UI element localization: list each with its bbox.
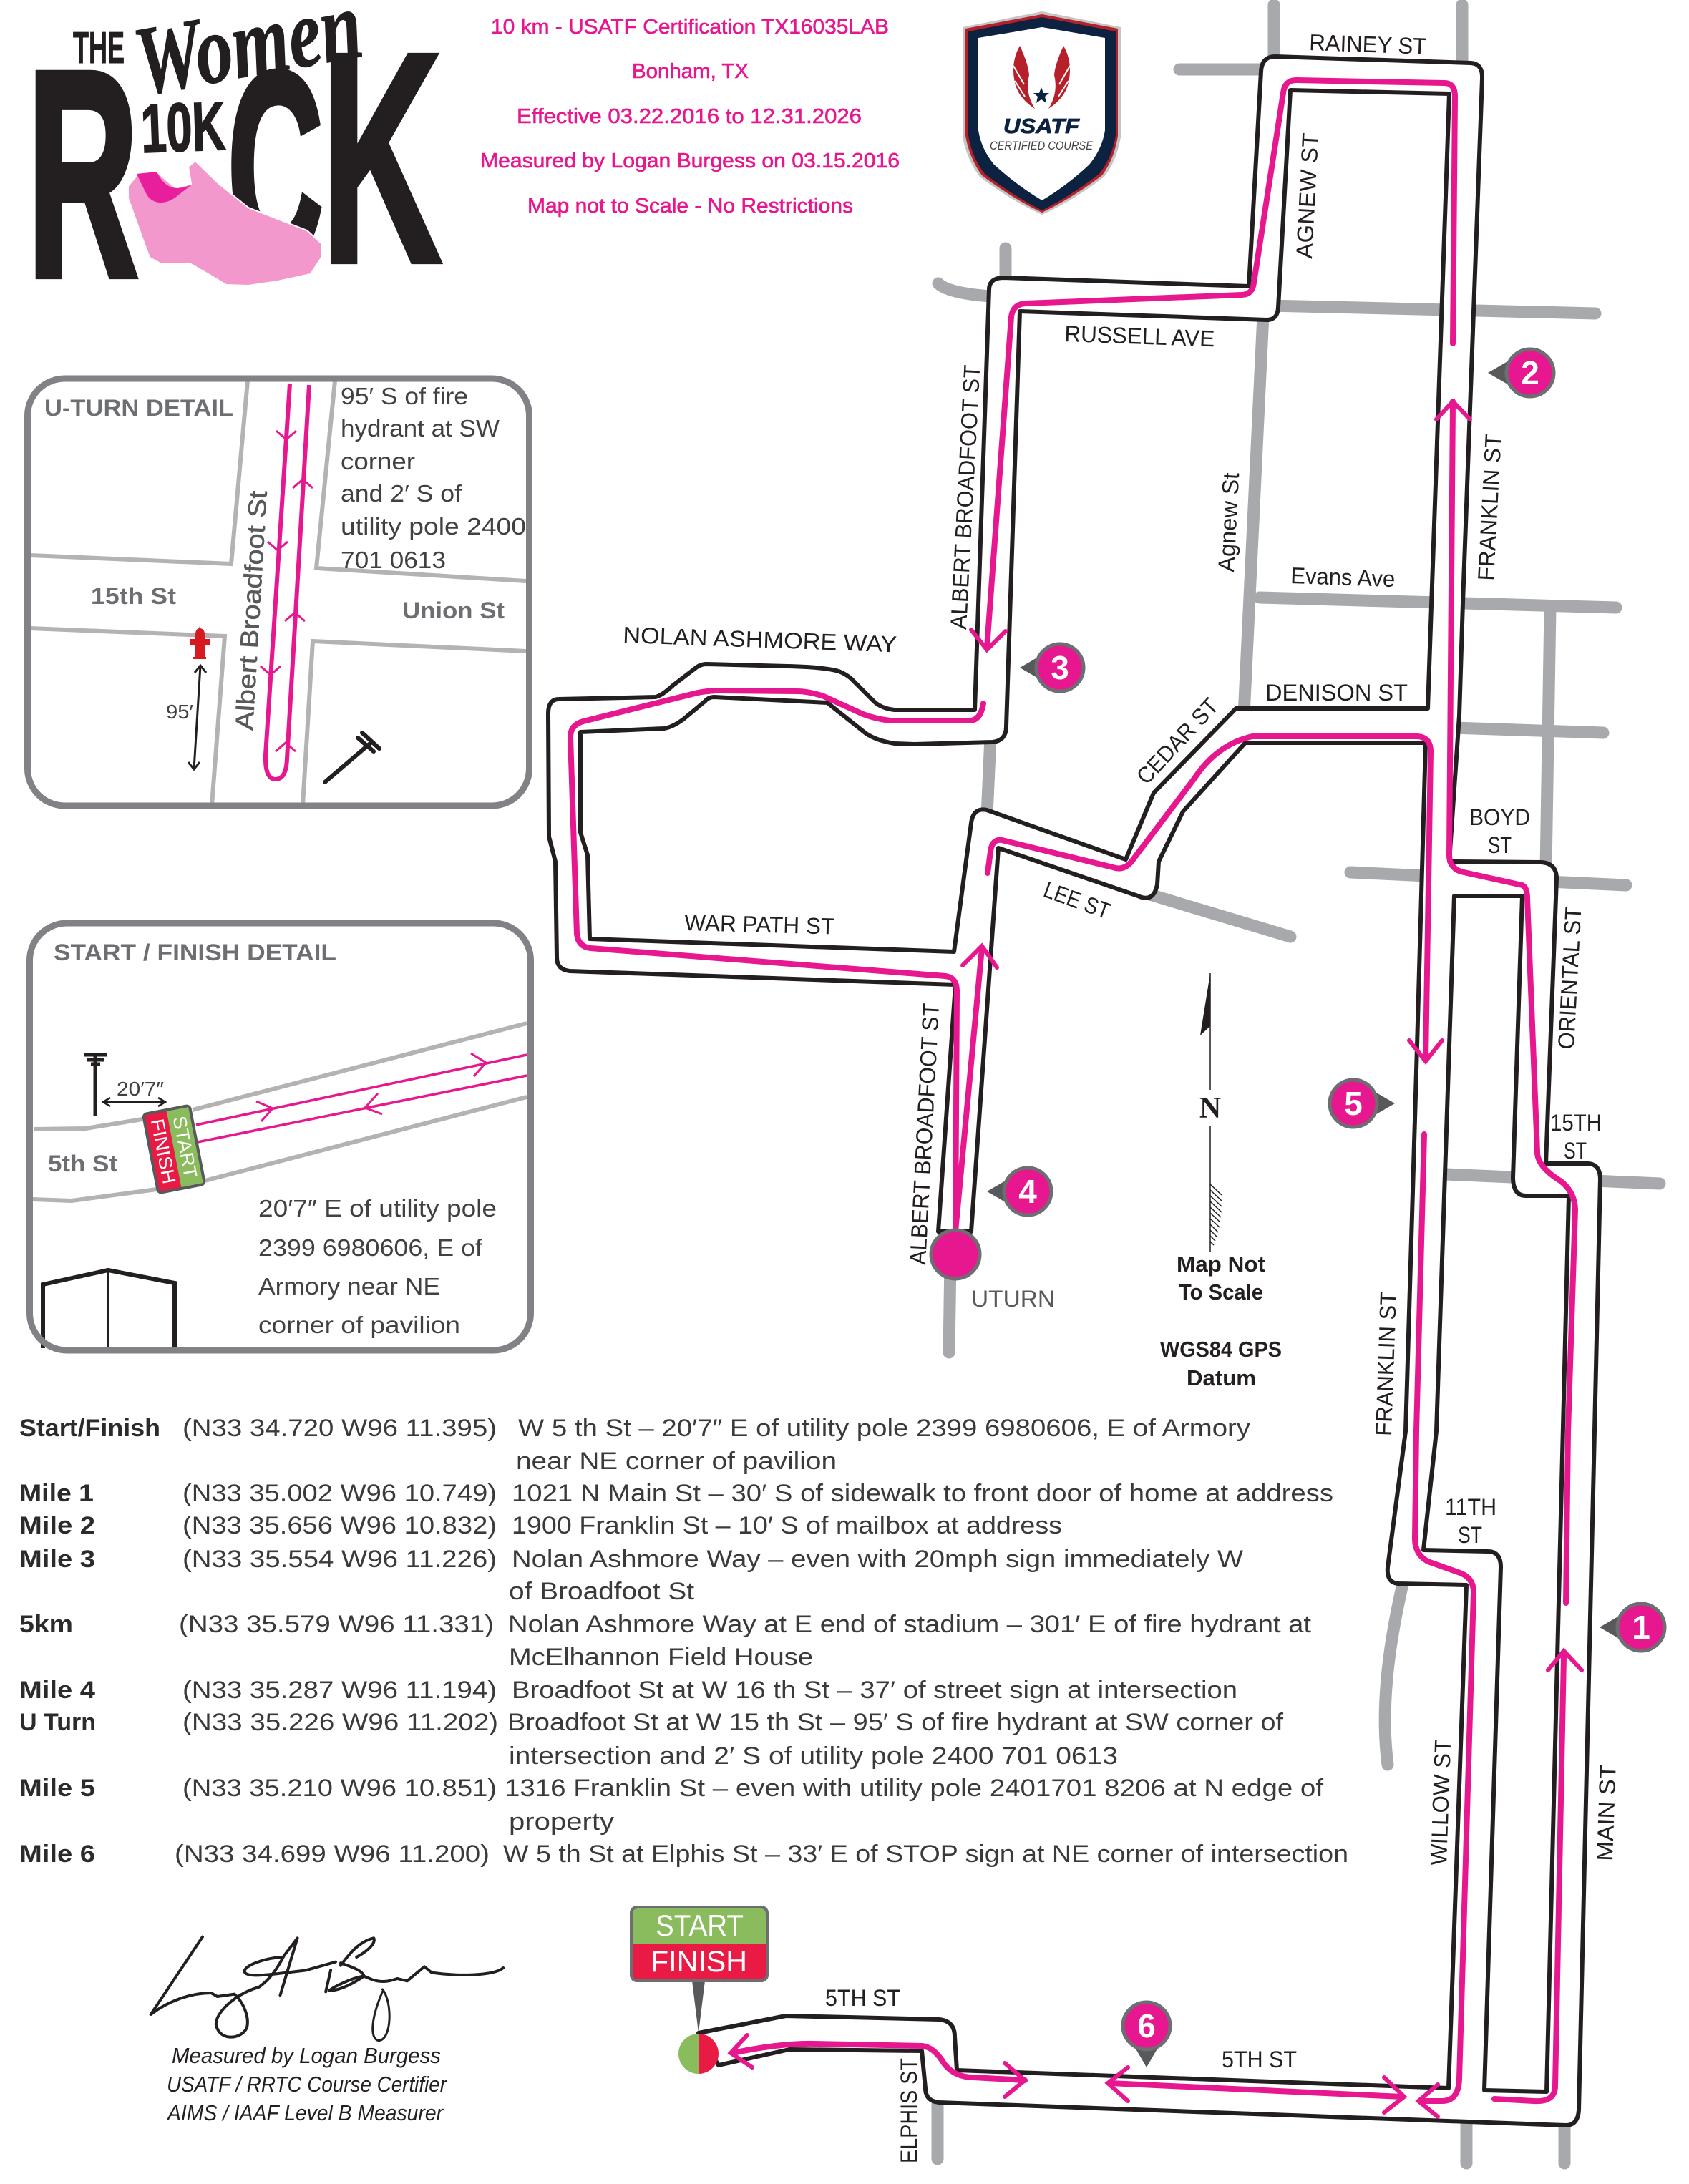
note: map not to scale and datum: Datum bbox=[1187, 1365, 1256, 1390]
panel: start / finish detail bbox=[30, 923, 531, 1350]
marker: mile 6 bbox=[1123, 2002, 1170, 2067]
header: certification details: Effective 03.22.2016 to 12.31.2026 bbox=[517, 105, 862, 128]
text: certifier credit: USATF / RRTC Course Certifier bbox=[167, 2072, 447, 2097]
marker: mile 4 bbox=[987, 1168, 1051, 1215]
map: street labels: 11TH bbox=[1445, 1494, 1496, 1520]
table: mile marker locations: 1021 N Main St – 30′ S of sidewalk to front door of home at address bbox=[512, 1480, 1333, 1507]
table: mile marker locations: Start/Finish bbox=[19, 1415, 160, 1442]
table: mile marker locations: (N33 35.002 W96 10.749) bbox=[182, 1480, 497, 1507]
marker: mile 4: 4 bbox=[1018, 1173, 1037, 1210]
marker: mile 1: 1 bbox=[1632, 1609, 1650, 1646]
header: certification details bbox=[480, 16, 900, 218]
panel: start / finish detail: 20′7″ bbox=[117, 1078, 164, 1100]
icon: USATF certified course badge: USATF bbox=[1003, 115, 1080, 138]
map: street labels: Agnew St bbox=[1213, 472, 1244, 572]
panel: U-turn detail: 15th St bbox=[91, 583, 176, 609]
panel: U-turn detail: Albert Broadfoot St bbox=[230, 489, 273, 731]
map: street labels: 5TH ST bbox=[1222, 2047, 1297, 2072]
panel: start / finish detail: 2399 6980606, E of bbox=[258, 1234, 483, 1261]
map: street labels: ELPHIS ST bbox=[896, 2058, 922, 2163]
marker: start finish flag bbox=[630, 1906, 769, 2074]
table: mile marker locations: (N33 35.579 W96 11.331) bbox=[179, 1611, 494, 1638]
table: mile marker locations: W 5 th St at Elphis St – 33′ E of STOP sign at NE corner of intersection bbox=[503, 1841, 1348, 1868]
table: mile marker locations: (N33 34.699 W96 11.200) bbox=[175, 1841, 490, 1868]
icon: USATF certified course badge: CERTIFIED COURSE bbox=[990, 140, 1094, 152]
text: certifier credit: Measured by Logan Burgess bbox=[172, 2043, 441, 2068]
header: certification details: Measured by Logan Burgess on 03.15.2016 bbox=[480, 150, 900, 172]
panel: U-turn detail: corner bbox=[341, 448, 415, 474]
table: mile marker locations: of Broadfoot St bbox=[509, 1578, 695, 1605]
marker: U-turn point bbox=[931, 1230, 980, 1279]
map: street labels: DENISON ST bbox=[1265, 680, 1408, 706]
map: road network outline bbox=[548, 57, 1600, 2125]
table: mile marker locations: Mile 3 bbox=[19, 1546, 95, 1573]
text: certifier credit bbox=[166, 2043, 447, 2125]
map: street labels: FRANKLIN ST bbox=[1371, 1291, 1401, 1436]
marker: mile 2: 2 bbox=[1521, 354, 1539, 391]
map: street labels: 5TH ST bbox=[825, 1985, 900, 2011]
table: mile marker locations: Mile 5 bbox=[19, 1775, 95, 1802]
table: mile marker locations: McElhannon Field House bbox=[509, 1644, 813, 1671]
note: map not to scale and datum: To Scale bbox=[1179, 1279, 1263, 1305]
header: certification details: Map not to Scale - No Restrictions bbox=[527, 195, 853, 218]
panel: start / finish detail: 5th St bbox=[48, 1151, 117, 1176]
icon: north arrow: N bbox=[1199, 1092, 1221, 1125]
table: mile marker locations: near NE corner of pavilion bbox=[516, 1448, 837, 1475]
marker: mile 3 bbox=[1020, 644, 1084, 691]
header: certification details: Bonham, TX bbox=[632, 60, 749, 83]
table: mile marker locations: Broadfoot St at W 15 th St – 95′ S of fire hydrant at SW corner of bbox=[507, 1709, 1284, 1736]
map: street labels: ST bbox=[1564, 1138, 1587, 1164]
panel: U-turn detail: 95′ bbox=[166, 701, 193, 723]
table: mile marker locations: 1900 Franklin St – 10′ S of mailbox at address bbox=[512, 1512, 1062, 1539]
map: gray side streets bbox=[938, 5, 1660, 2163]
map: street labels: CEDAR ST bbox=[1131, 693, 1223, 789]
panel: U-turn detail: U-TURN DETAIL bbox=[44, 395, 233, 421]
panel: U-turn detail: Union St bbox=[402, 598, 505, 623]
panel: start / finish detail: START / FINISH DETAIL bbox=[54, 940, 336, 965]
table: mile marker locations: Nolan Ashmore Way at E end of stadium – 301′ E of fire hydrant at bbox=[508, 1611, 1312, 1638]
note: map not to scale and datum: WGS84 GPS bbox=[1160, 1337, 1282, 1362]
map: street labels: RUSSELL AVE bbox=[1064, 321, 1215, 351]
marker: mile 2 bbox=[1488, 349, 1554, 396]
table: mile marker locations: (N33 35.210 W96 10.851) bbox=[182, 1775, 497, 1802]
panel: U-turn detail: 95′ S of fire bbox=[341, 383, 468, 409]
map: street labels: WILLOW ST bbox=[1426, 1739, 1456, 1866]
panel: start / finish detail: START bbox=[169, 1114, 202, 1180]
panel: U-turn detail bbox=[27, 379, 530, 806]
marker: mile 1 bbox=[1600, 1604, 1665, 1651]
marker: mile 6: 6 bbox=[1137, 2007, 1156, 2044]
table: mile marker locations: Broadfoot St at W 16 th St – 37′ of street sign at intersection bbox=[512, 1677, 1237, 1704]
table: mile marker locations: Mile 2 bbox=[19, 1512, 95, 1539]
map: street labels: ST bbox=[1488, 832, 1512, 858]
map: street labels: LEE ST bbox=[1041, 877, 1114, 924]
map: street labels: MAIN ST bbox=[1592, 1764, 1621, 1861]
table: mile marker locations: intersection and 2′ S of utility pole 2400 701 0613 bbox=[509, 1742, 1118, 1770]
table: mile marker locations: (N33 35.656 W96 10.832) bbox=[182, 1512, 497, 1539]
map: street labels bbox=[623, 29, 1621, 2163]
table: mile marker locations: (N33 35.226 W96 11.202) bbox=[182, 1709, 498, 1736]
marker: mile 3: 3 bbox=[1051, 649, 1069, 686]
map: street labels: AGNEW ST bbox=[1291, 132, 1323, 259]
panel: start / finish detail: corner of pavilion bbox=[258, 1312, 460, 1338]
logo: The Women 10K Rock: K bbox=[321, 0, 442, 326]
table: mile marker locations: Mile 4 bbox=[19, 1677, 95, 1704]
marker: start finish flag: FINISH bbox=[651, 1944, 747, 1978]
map: street labels: BOYD bbox=[1469, 804, 1530, 830]
table: mile marker locations: 5km bbox=[19, 1611, 73, 1638]
map: street labels: WAR PATH ST bbox=[684, 910, 835, 939]
table: mile marker locations: property bbox=[509, 1808, 614, 1836]
table: mile marker locations: Mile 6 bbox=[19, 1841, 95, 1868]
marker: mile 5: 5 bbox=[1344, 1085, 1363, 1122]
table: mile marker locations: (N33 34.720 W96 11.395) bbox=[182, 1415, 497, 1442]
panel: U-turn detail: utility pole 2400 bbox=[341, 513, 526, 540]
panel: U-turn detail: hydrant at SW bbox=[341, 415, 500, 442]
logo: The Women 10K Rock: 10K bbox=[140, 88, 227, 167]
marker: mile 5 bbox=[1330, 1080, 1395, 1127]
icon: USATF certified course badge bbox=[963, 11, 1121, 215]
map: street labels: NOLAN ASHMORE WAY bbox=[623, 622, 897, 657]
logo: The Women 10K Rock bbox=[27, 0, 442, 338]
note: map not to scale and datum: Map Not bbox=[1177, 1252, 1265, 1277]
signature bbox=[151, 1937, 503, 2041]
table: mile marker locations: W 5 th St – 20′7″ E of utility pole 2399 6980606, E of Armory bbox=[518, 1415, 1250, 1442]
map: street labels: Evans Ave bbox=[1290, 562, 1396, 592]
panel: U-turn detail: and 2′ S of bbox=[341, 480, 462, 507]
panel: U-turn detail: 701 0613 bbox=[341, 547, 446, 573]
map: street labels: ST bbox=[1458, 1522, 1482, 1548]
text: certifier credit: AIMS / IAAF Level B Measurer bbox=[166, 2100, 444, 2125]
table: mile marker locations: (N33 35.287 W96 11.194) bbox=[182, 1677, 497, 1704]
panel: start / finish detail: Armory near NE bbox=[258, 1273, 440, 1300]
map: street labels: 15TH bbox=[1550, 1110, 1602, 1136]
table: mile marker locations: Nolan Ashmore Way – even with 20mph sign immediately W bbox=[512, 1546, 1243, 1573]
map: street labels: ALBERT BROADFOOT ST bbox=[905, 1003, 944, 1265]
logo: The Women 10K Rock: C bbox=[228, 16, 323, 316]
table: mile marker locations: 1316 Franklin St – even with utility pole 2401701 8206 at N edge of bbox=[505, 1775, 1324, 1802]
map: street labels: ALBERT BROADFOOT ST bbox=[945, 364, 985, 630]
marker: start finish flag: START bbox=[656, 1908, 744, 1942]
table: mile marker locations: Mile 1 bbox=[19, 1480, 94, 1507]
table: mile marker locations: U Turn bbox=[19, 1709, 96, 1736]
map: street labels: UTURN bbox=[971, 1286, 1055, 1312]
table: mile marker locations: (N33 35.554 W96 11.226) bbox=[182, 1546, 497, 1573]
icon: north arrow bbox=[1199, 973, 1222, 1252]
panel: start / finish detail: 20′7″ E of utility pole bbox=[258, 1195, 497, 1222]
map: street labels: ORIENTAL ST bbox=[1553, 906, 1586, 1050]
logo: The Women 10K Rock: R bbox=[27, 11, 138, 338]
logo: The Women 10K Rock: THE bbox=[73, 24, 125, 73]
map: street labels: RAINEY ST bbox=[1309, 29, 1427, 59]
note: map not to scale and datum bbox=[1160, 1252, 1282, 1390]
map: pink course route bbox=[570, 80, 1582, 2117]
header: certification details: 10 km - USATF Certification TX16035LAB bbox=[491, 16, 889, 39]
table: mile marker locations bbox=[19, 1415, 1348, 1868]
map: street labels: FRANKLIN ST bbox=[1473, 434, 1507, 581]
panel: start / finish detail: FINISH bbox=[147, 1117, 180, 1186]
